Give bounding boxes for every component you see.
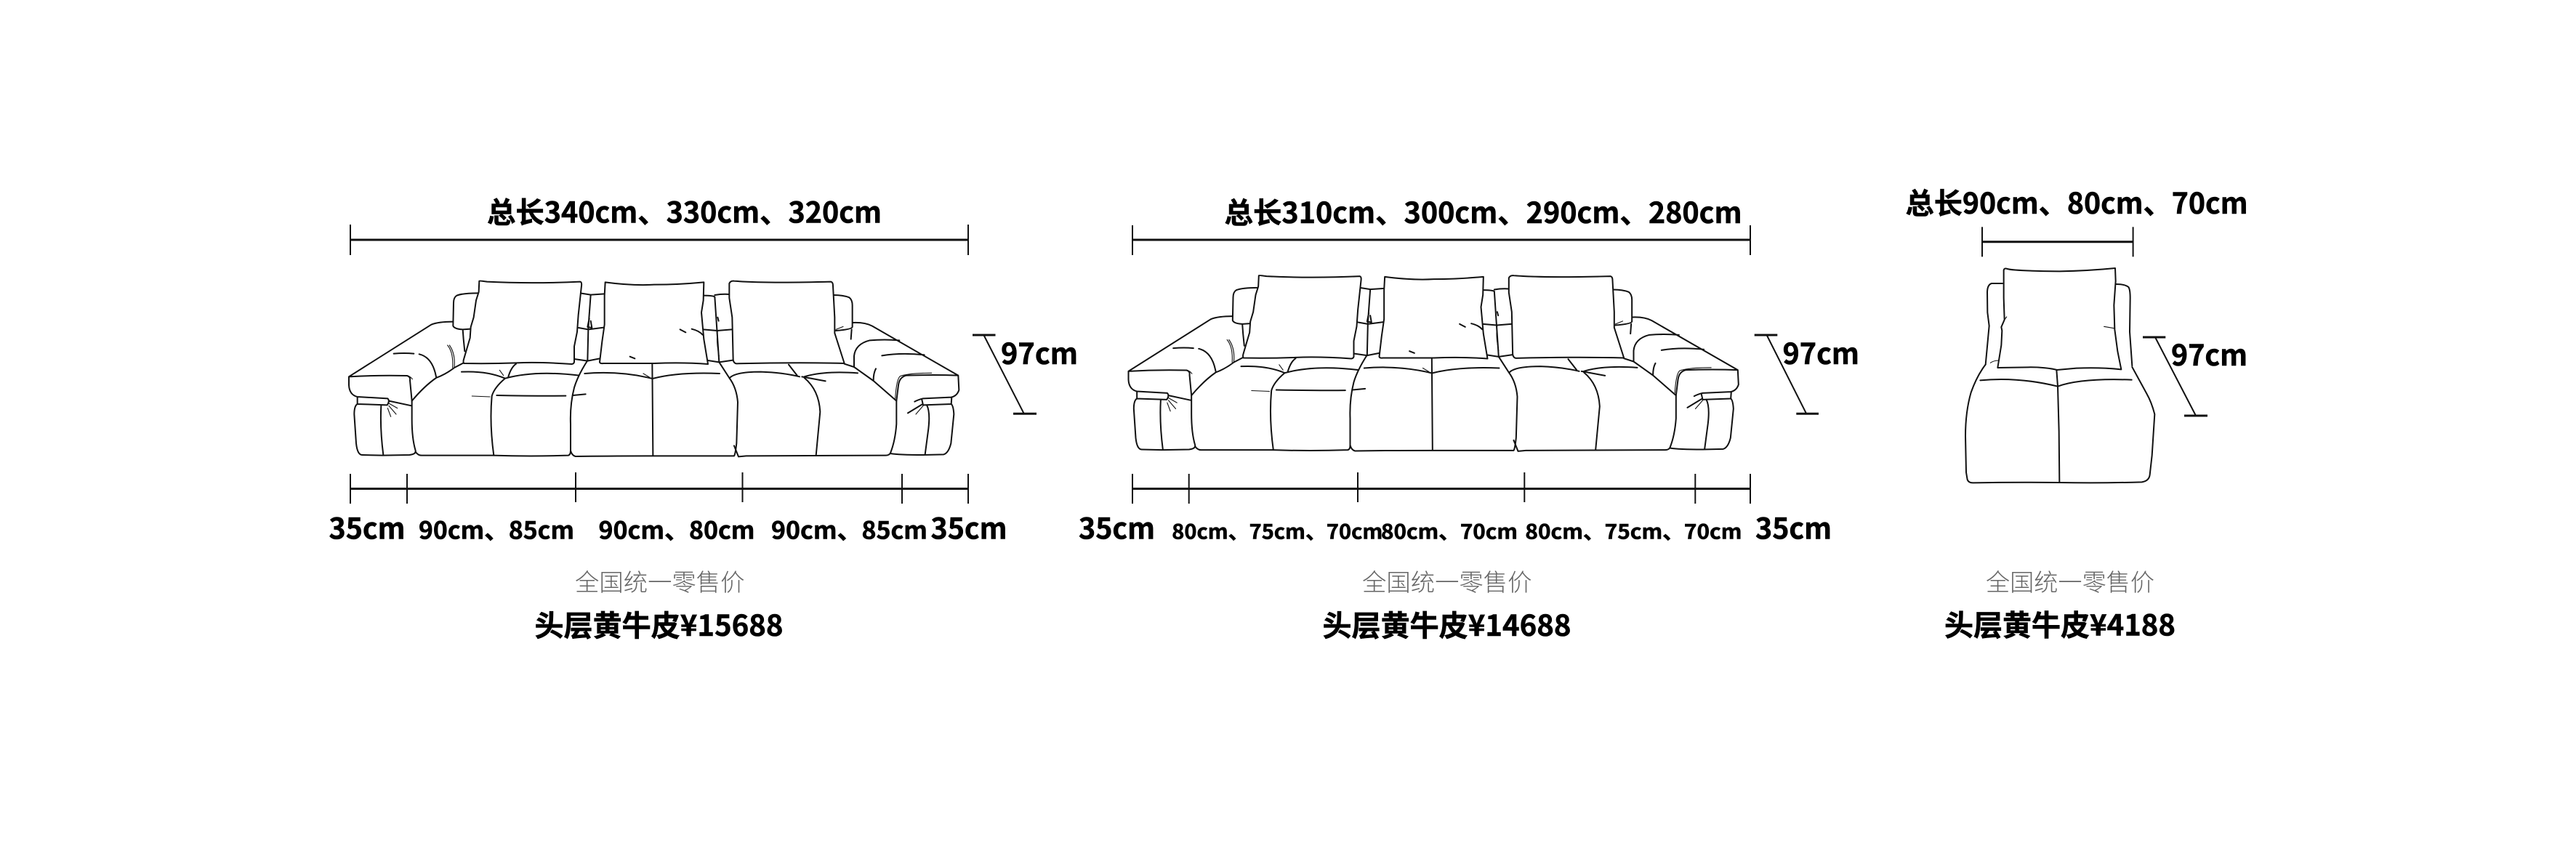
panel: three-seat sofa, 340cm size — [329, 189, 1078, 645]
label: height: 97cm — [1001, 331, 1078, 373]
heading: total length: 总长310cm、300cm、290cm、280cm — [1224, 190, 1742, 232]
caption: retail price note: 全国统一零售价 — [575, 563, 744, 598]
label: height: 97cm — [2171, 332, 2247, 374]
price: 头层黄牛皮¥14688 — [1323, 602, 1571, 645]
drawing: three-seat sofa line art — [1128, 275, 1739, 451]
label: right seat width: 90cm、85cm — [771, 512, 927, 547]
dimension line: total length — [1132, 225, 1750, 255]
label: right arm width: 35cm — [1755, 506, 1832, 548]
dimension line: total length — [1982, 227, 2133, 257]
caption: retail price note: 全国统一零售价 — [1986, 563, 2154, 598]
dimension line: section widths — [350, 472, 968, 504]
label: middle seat width: 90cm、80cm — [599, 512, 754, 547]
label: left arm width: 35cm — [329, 506, 406, 548]
label: height: 97cm — [1782, 331, 1859, 373]
label: left seat width: 90cm、85cm — [419, 512, 574, 547]
drawing: single-seat line art — [1965, 268, 2154, 483]
drawing: three-seat sofa line art — [349, 281, 959, 456]
label: middle seat width: 80cm、70cm — [1381, 516, 1518, 545]
dimension line: section widths — [1132, 472, 1750, 504]
dimension line: height — [1755, 335, 1819, 414]
heading: total length: 总长90cm、80cm、70cm — [1906, 180, 2247, 222]
caption: retail price note: 全国统一零售价 — [1362, 563, 1532, 598]
dimension line: total length — [350, 225, 968, 255]
label: right arm width: 35cm — [930, 506, 1007, 548]
label: left seat width: 80cm、75cm、70cm — [1172, 516, 1382, 545]
heading: total length: 总长340cm、330cm、320cm — [487, 189, 882, 231]
dimension line: height — [973, 335, 1037, 414]
panel: single-seat module — [1906, 180, 2247, 644]
panel: three-seat sofa, 310cm size — [1079, 190, 1859, 645]
label: left arm width: 35cm — [1079, 506, 1155, 548]
price: 头层黄牛皮¥4188 — [1944, 602, 2175, 644]
price: 头层黄牛皮¥15688 — [535, 602, 784, 645]
label: right seat width: 80cm、75cm、70cm — [1525, 516, 1742, 545]
dimension line: height — [2143, 337, 2207, 416]
